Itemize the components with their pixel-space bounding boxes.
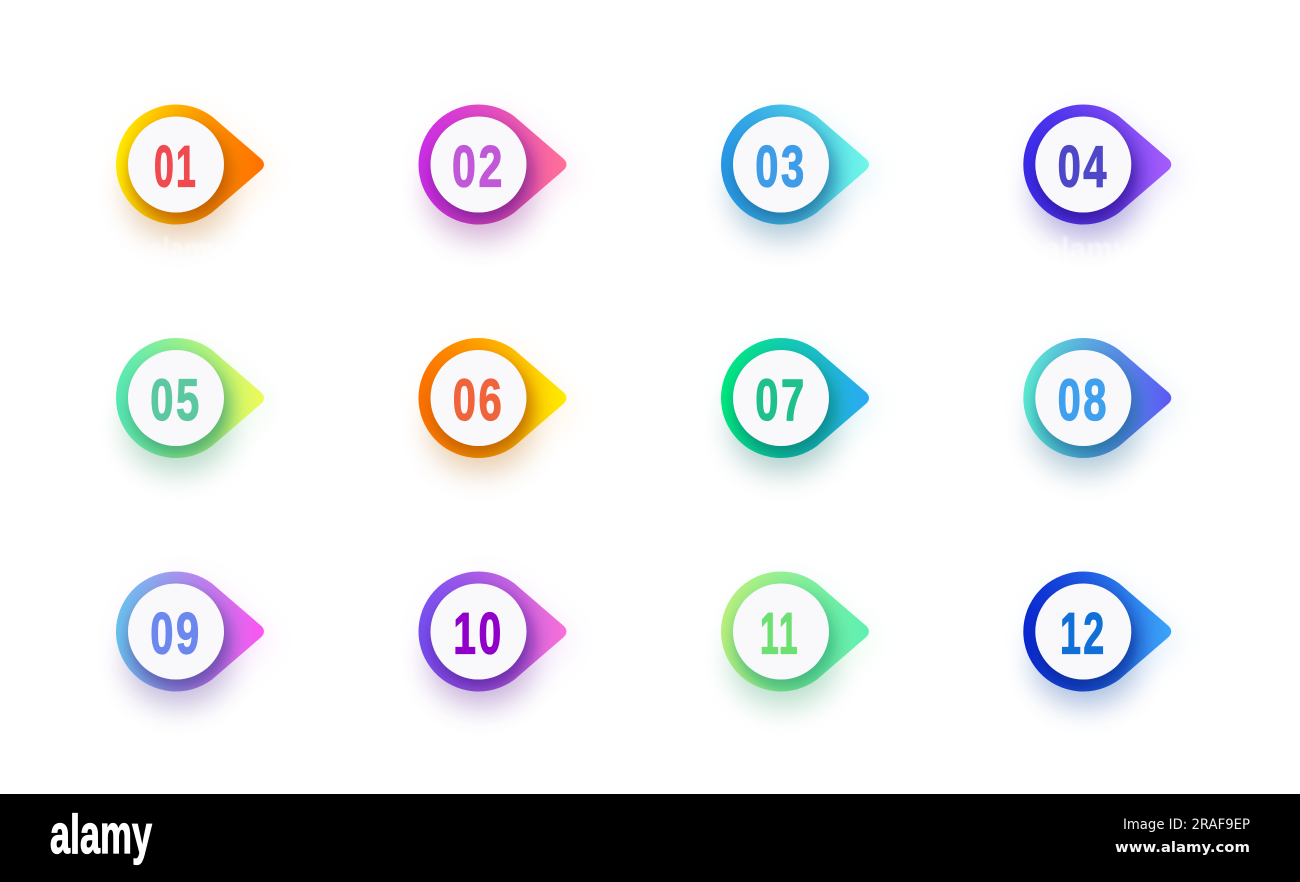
pin 11: 11 [760, 602, 800, 667]
pin 03: 03 [755, 134, 807, 199]
pin 10 [418, 572, 574, 708]
pin 12: 12 [1060, 603, 1107, 667]
alamy logo: alamy [50, 803, 152, 865]
pin 08 [1023, 338, 1178, 474]
faint watermark under pin 04: alamy [1044, 231, 1130, 267]
website: www.alamy.com [1115, 840, 1250, 856]
pin 07 [721, 338, 876, 474]
footer band [0, 794, 1300, 882]
pin 02: 02 [452, 134, 505, 199]
pin 04: 04 [1058, 134, 1109, 199]
pin 03 [721, 104, 876, 240]
pin 04 [1023, 104, 1178, 240]
pin 08: 08 [1058, 367, 1109, 433]
pin 05 [116, 338, 271, 474]
faint watermark under pin 01: alamy [148, 231, 222, 267]
pin 09 [116, 572, 271, 708]
pin 01: 01 [154, 135, 198, 200]
pin 06 [418, 338, 574, 474]
image id: Image ID: 2RAF9EP [1123, 817, 1250, 833]
pin 06: 06 [453, 367, 504, 433]
pin 02 [418, 104, 574, 240]
pin 01 [116, 104, 271, 240]
pin 09: 09 [150, 601, 202, 666]
pin 12 [1023, 572, 1178, 708]
pin 10: 10 [453, 601, 504, 666]
pin 05: 05 [150, 367, 202, 433]
pin 07: 07 [755, 367, 807, 433]
pin 11 [721, 572, 876, 708]
